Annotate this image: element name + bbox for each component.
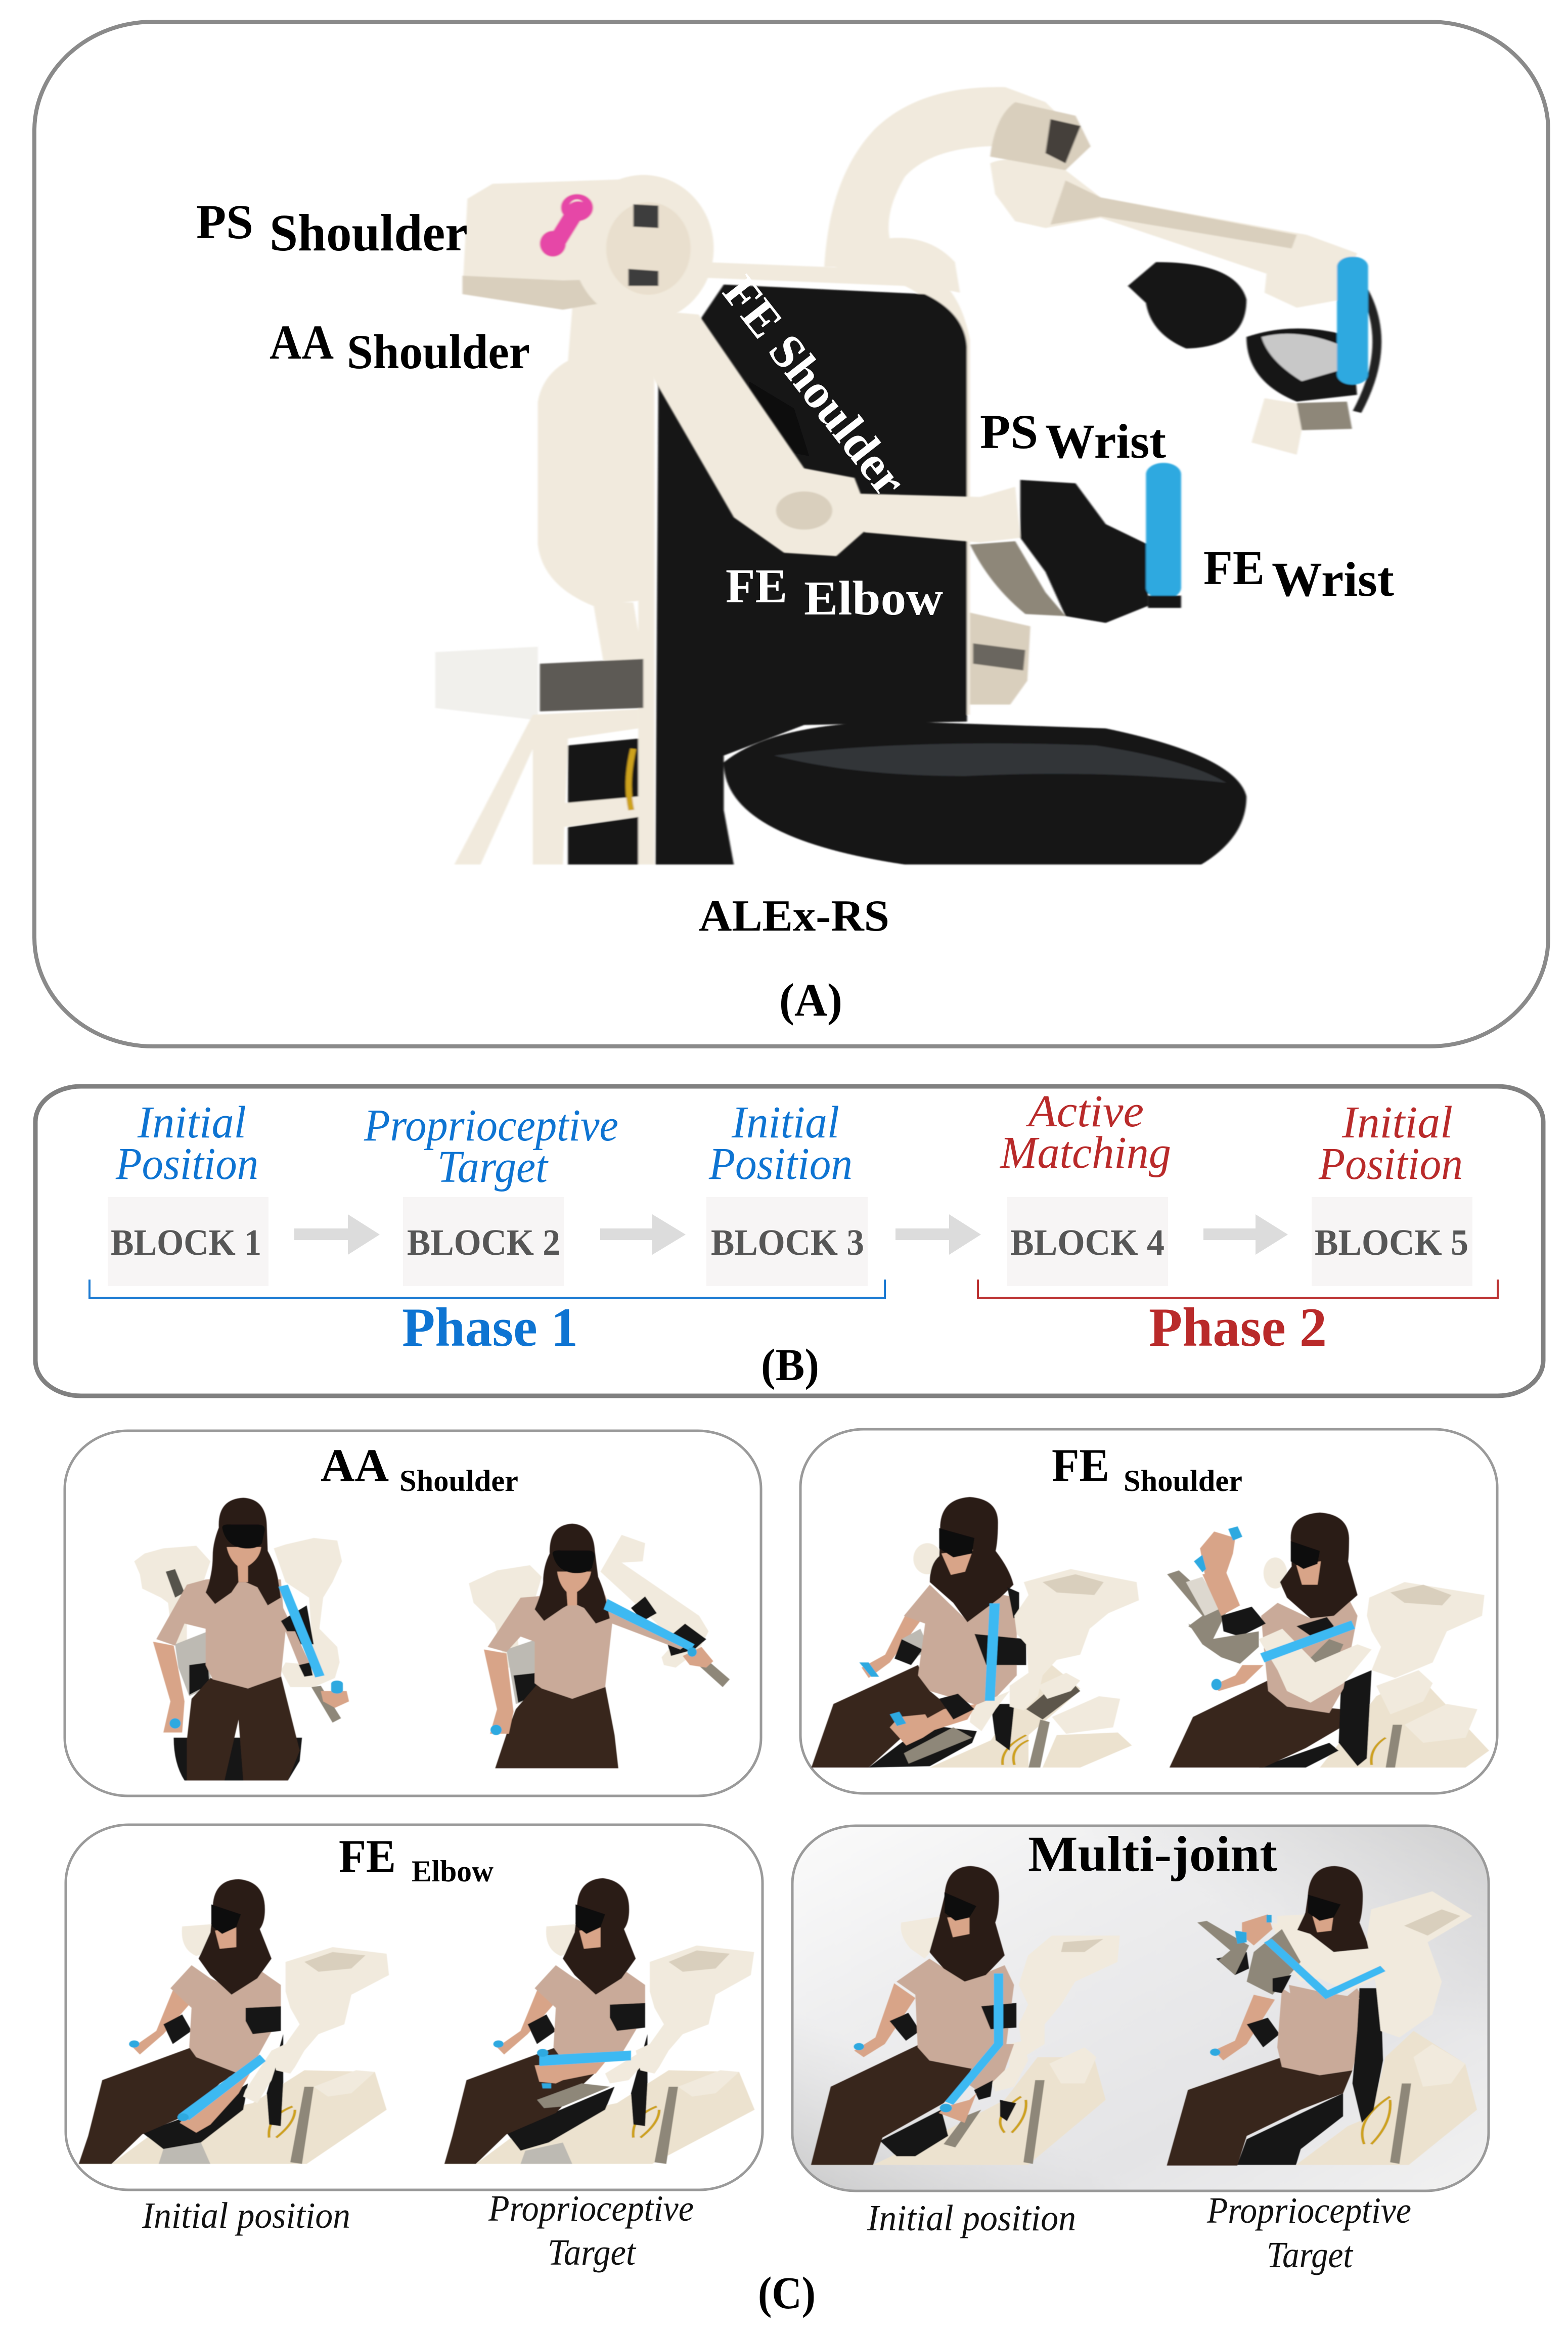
panel B frame — [35, 1086, 1543, 1396]
label: FE Elbow — [726, 559, 943, 625]
label: AA Shoulder — [270, 315, 530, 379]
bracket: phase 2 — [978, 1280, 1498, 1298]
block 4: BLOCK 4 — [1010, 1222, 1164, 1263]
figure: FE shoulder initial position — [812, 1497, 1139, 1768]
caption: Proprioceptive Target under FE Elbow: Target — [548, 2232, 637, 2273]
label: FE Shoulder rotated: FE Shoulder — [712, 266, 917, 506]
figure: FE elbow initial position — [79, 1879, 389, 2164]
block 2 — [403, 1197, 564, 1286]
panel: A ALEx-RS robot — [34, 22, 1548, 1046]
caption: Proprioceptive Target under Multi-joint — [1206, 2190, 1411, 2275]
multi-joint title: Multi-joint — [1028, 1826, 1277, 1882]
bracket: phase 1 — [89, 1280, 885, 1298]
caption: Initial Position 1: Position — [115, 1139, 258, 1189]
label: Phase 2: Phase 2 — [1149, 1297, 1327, 1358]
block 5: BLOCK 5 — [1315, 1222, 1468, 1263]
figure: AA initial position — [134, 1498, 349, 1780]
arrow 3 to 4 — [895, 1214, 981, 1255]
FE shoulder panel frame — [800, 1429, 1497, 1793]
label: AA Shoulder: AA — [270, 315, 334, 369]
caption: Initial position under Multi-joint: Initial position — [867, 2197, 1076, 2238]
photo: ALEx-RS exoskeleton chair — [435, 87, 1377, 864]
figure: multi-joint proprioceptive target — [1167, 1866, 1477, 2166]
caption: Active Matching: Matching — [999, 1128, 1171, 1178]
figure: FE elbow proprioceptive target — [444, 1878, 754, 2164]
caption: Proprioceptive Target under FE Elbow — [488, 2188, 694, 2273]
caption: Initial Position 3: Position — [708, 1139, 853, 1189]
caption: Initial Position 5: Initial — [1341, 1097, 1453, 1148]
shoulder joint ring — [573, 175, 713, 322]
AA title — [321, 1439, 518, 1498]
white sensor box — [435, 647, 538, 720]
arrow 1 to 2 — [294, 1214, 380, 1255]
raised arm blue grip — [1337, 256, 1368, 384]
raised arm cuffs — [1128, 262, 1246, 348]
block 5 — [1312, 1197, 1472, 1286]
seat back housing — [538, 293, 653, 606]
label: PS Wrist — [980, 405, 1166, 468]
vertical post — [638, 299, 654, 864]
caption: Initial Position 5 — [1318, 1097, 1463, 1189]
panel: FE Elbow — [66, 1825, 763, 2190]
side rail — [970, 612, 1031, 705]
multi-joint panel frame — [792, 1826, 1489, 2191]
block 1 — [108, 1197, 268, 1286]
frame legs — [455, 710, 638, 864]
forearm link — [855, 487, 1020, 543]
AA panel frame — [65, 1431, 761, 1796]
arrow 2 to 3 — [600, 1214, 686, 1255]
caption: Initial position under FE Elbow: Initial position — [142, 2195, 350, 2236]
black seat back — [655, 285, 967, 864]
label: PS Wrist: Wrist — [1045, 414, 1166, 468]
caption: Proprioceptive Target — [364, 1101, 618, 1192]
block 3 — [706, 1197, 868, 1286]
raised arm wrist hardware — [1251, 398, 1307, 455]
label: FE Elbow: Elbow — [804, 571, 943, 625]
label: Phase 1: Phase 1 — [402, 1297, 578, 1358]
FE shoulder title: Shoulder — [1124, 1464, 1242, 1498]
caption: Initial Position 3 — [708, 1097, 853, 1189]
FE shoulder title — [1052, 1439, 1242, 1498]
seat cushion — [724, 722, 1246, 864]
figure: AA proprioceptive target — [469, 1524, 730, 1768]
label: ALEx-RS: ALEx-RS — [699, 892, 889, 941]
caption: Proprioceptive Target under Multi-joint: Target — [1267, 2234, 1354, 2275]
panel: B protocol blocks — [35, 1086, 1543, 1396]
pink ALEx logo — [555, 208, 578, 245]
metal wrist arc — [970, 541, 1065, 616]
FE shoulder title: FE — [1052, 1439, 1109, 1491]
photo: arm links and wrist in front of label — [643, 310, 1181, 623]
block 2: BLOCK 2 — [407, 1222, 560, 1263]
label: PS Wrist: PS — [980, 405, 1038, 459]
AA title: AA — [321, 1439, 389, 1491]
AA title: Shoulder — [399, 1464, 518, 1498]
caption: Initial Position 3: Initial — [731, 1097, 839, 1148]
figure: multi-joint initial position — [811, 1866, 1120, 2165]
top frame — [704, 262, 970, 715]
wrist cuff — [1020, 480, 1148, 623]
upper arm link — [643, 310, 873, 556]
label: PS Shoulder — [196, 195, 468, 262]
arrow 4 to 5 — [1203, 1214, 1288, 1255]
horizontal rail — [540, 659, 643, 712]
label: PS Shoulder: Shoulder — [270, 204, 468, 262]
block 3: BLOCK 3 — [711, 1222, 864, 1263]
caption: Initial Position 1: Initial — [137, 1097, 246, 1148]
label: FE Elbow: FE — [726, 559, 787, 613]
caption: Active Matching: Active — [1026, 1086, 1144, 1136]
label: FE Wrist: Wrist — [1272, 552, 1394, 606]
caption: Initial Position 1 — [115, 1097, 258, 1189]
caption: Proprioceptive Target: Proprioceptive — [364, 1101, 618, 1151]
caption: Proprioceptive Target under Multi-joint: Proprioceptive — [1206, 2190, 1411, 2231]
elbow joint — [776, 492, 832, 530]
raised arm arch — [824, 87, 1091, 293]
shoulder housing — [462, 179, 704, 310]
label: (A): (A) — [779, 974, 842, 1026]
panel A frame — [34, 22, 1548, 1046]
panel: FE Shoulder — [800, 1429, 1497, 1793]
panel: AA Shoulder — [65, 1431, 761, 1796]
caption: Proprioceptive Target: Target — [437, 1142, 549, 1192]
label: PS Shoulder: PS — [196, 195, 253, 249]
panel: Multi-joint — [792, 1826, 1489, 2191]
label: FE Wrist — [1203, 541, 1394, 606]
block 4 — [1007, 1197, 1168, 1286]
caption: Initial Position 5: Position — [1318, 1139, 1463, 1189]
caption: Active Matching — [999, 1086, 1171, 1178]
FE elbow title — [339, 1830, 494, 1888]
caption: Proprioceptive Target under FE Elbow: Proprioceptive — [488, 2188, 694, 2229]
block 1: BLOCK 1 — [111, 1222, 261, 1263]
label: AA Shoulder: Shoulder — [347, 325, 530, 379]
FE elbow title: FE — [339, 1830, 396, 1882]
FE elbow panel frame — [66, 1825, 763, 2190]
FE elbow title: Elbow — [412, 1855, 494, 1888]
label: (C): (C) — [758, 2268, 816, 2318]
blue wrist grip — [1146, 463, 1181, 599]
label: (B): (B) — [761, 1340, 819, 1390]
label: FE Wrist: FE — [1203, 541, 1265, 595]
figure: FE shoulder proprioceptive target — [1167, 1513, 1489, 1768]
